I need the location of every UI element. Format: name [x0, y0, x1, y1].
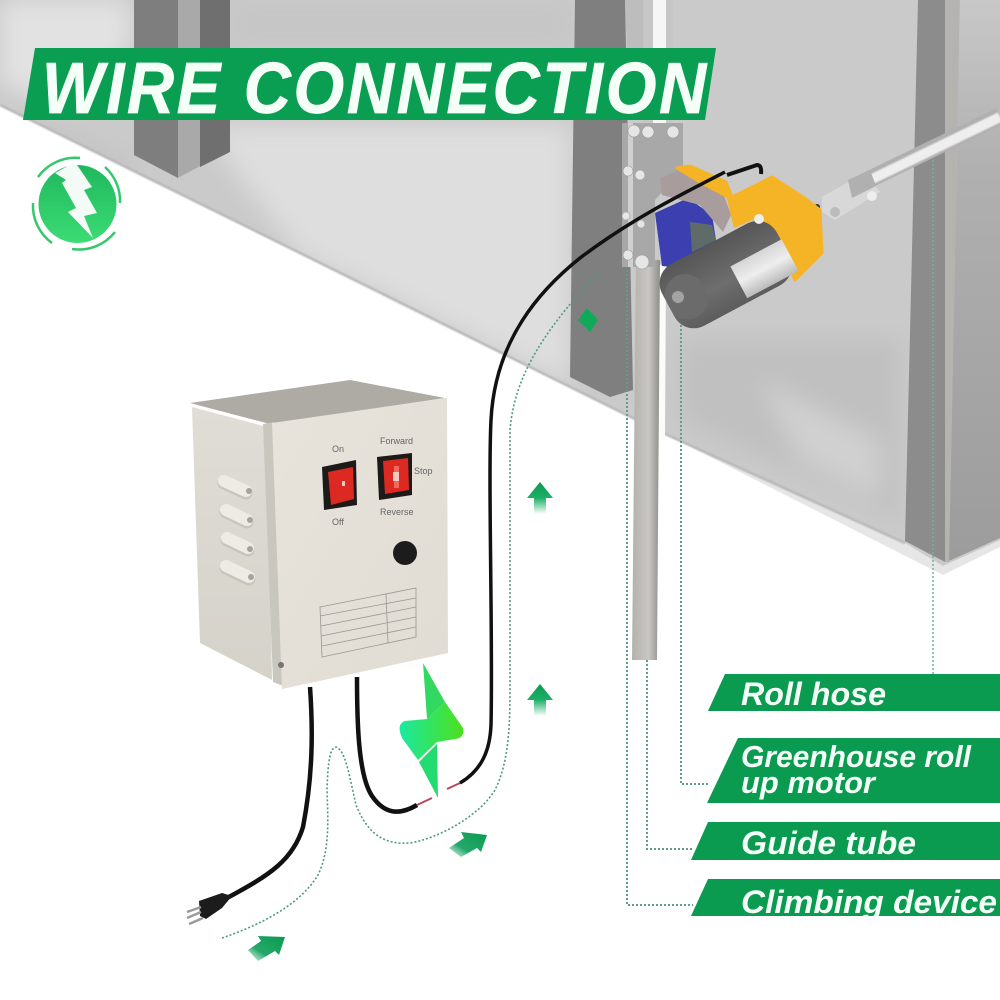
- arrow: top: [578, 308, 598, 332]
- knob: [393, 541, 417, 565]
- screw: [278, 662, 284, 668]
- bracket with bolts: [622, 123, 683, 269]
- floor slab: [0, 90, 1000, 575]
- arrow: wire right: [449, 832, 487, 857]
- wall: [0, 0, 1000, 600]
- switch: on off: [322, 460, 357, 510]
- background: greenhouse wall and floor: [0, 0, 1000, 575]
- box front panel: [272, 398, 448, 689]
- box flange: [263, 422, 286, 687]
- icon: power circle with lightning bolt: [33, 158, 120, 250]
- label: guide tube: Guide tube: [741, 825, 916, 861]
- switch labels: Reverse: [380, 507, 414, 517]
- control box: [190, 380, 448, 689]
- arrow: bottom: [248, 936, 285, 961]
- label: climbing device: Climbing device: [741, 884, 997, 920]
- drive rod: [814, 116, 1000, 220]
- output wire left: [357, 677, 432, 812]
- output wire right to motor: [447, 165, 761, 789]
- column: middle post: [570, 0, 643, 397]
- switch labels: [332, 436, 433, 527]
- motor can: [730, 239, 798, 298]
- label: guide tube: [691, 822, 1000, 861]
- box side: [192, 407, 272, 680]
- switch labels: Forward: [380, 436, 413, 446]
- title text: WIRE CONNECTION: [42, 48, 709, 129]
- label: roll hose: Roll hose: [741, 676, 886, 712]
- label: greenhouse roll up motor: [707, 738, 1000, 803]
- motor: [652, 166, 822, 336]
- dotted guide: guide tube: [647, 660, 693, 849]
- arrow: up lower: [527, 684, 553, 716]
- switch labels: Stop: [414, 466, 433, 476]
- dotted guide: roll hose: [932, 160, 934, 674]
- label: climbing device: [691, 879, 1000, 920]
- spec plate: [320, 588, 416, 657]
- box top: [190, 380, 445, 424]
- column: right post: [905, 0, 1000, 562]
- yellow housing: [677, 166, 822, 280]
- icon: green lightning bolt: [400, 663, 463, 798]
- power cord with plug: [187, 687, 312, 924]
- switch labels: On: [332, 444, 344, 454]
- floor edge shadow: [0, 105, 905, 543]
- title banner: [23, 48, 716, 129]
- dotted guide: climbing device: [627, 270, 693, 905]
- column: left post: [134, 0, 230, 178]
- metal block: [660, 170, 731, 232]
- label: roll hose: [708, 674, 1000, 712]
- switch labels: Off: [332, 517, 344, 527]
- dotted wiring route: [222, 270, 600, 938]
- switch: forward reverse: [377, 453, 412, 500]
- guide tube: [632, 0, 673, 660]
- motor body: [652, 213, 800, 336]
- label: greenhouse roll up motor: Greenhouse roll: [741, 739, 972, 774]
- dotted guide: roll up motor: [681, 325, 708, 784]
- gearbox: [655, 198, 716, 268]
- vents: [224, 481, 254, 580]
- arrow: up upper: [527, 482, 553, 514]
- label: greenhouse roll up motor: up motor: [741, 765, 877, 800]
